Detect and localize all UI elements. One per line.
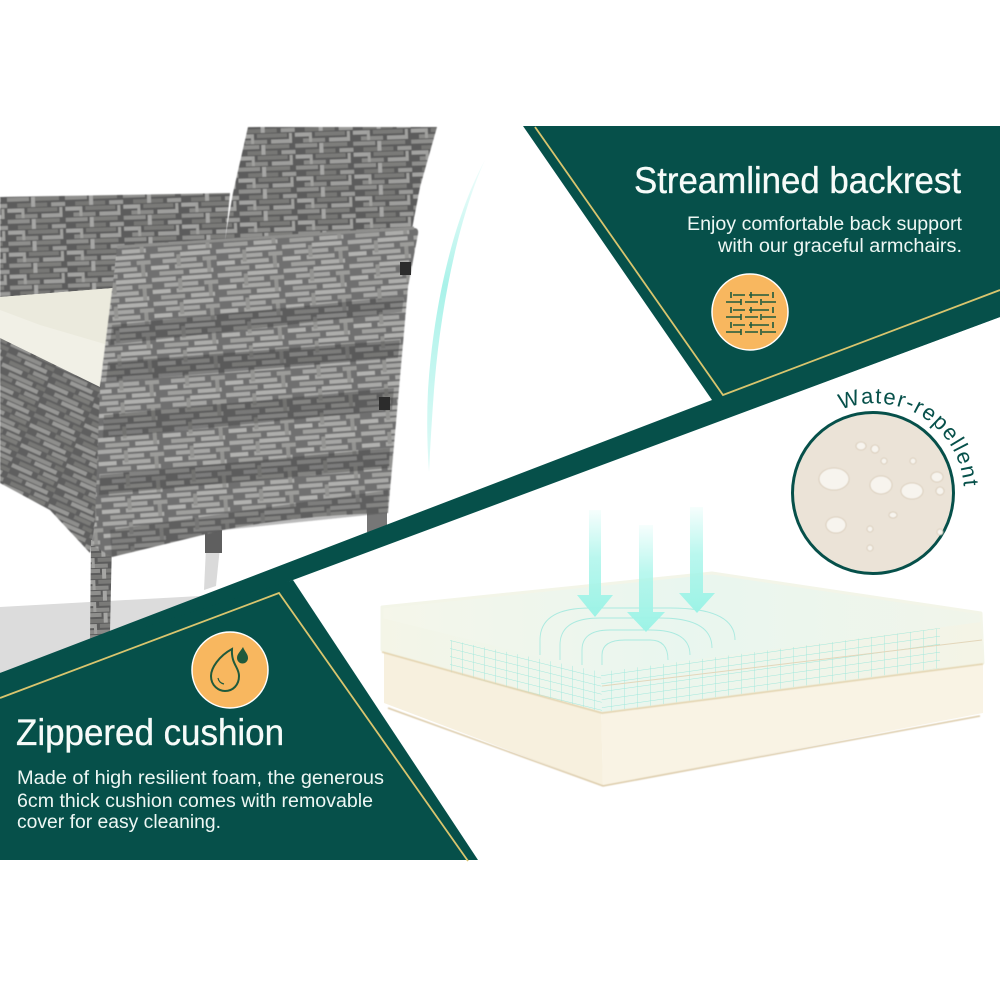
water droplets	[819, 442, 944, 551]
water-repellent swatch	[791, 389, 978, 575]
chair front arm panel	[92, 228, 418, 557]
icon: wicker weave	[712, 274, 788, 350]
heading: Streamlined backrest	[634, 160, 962, 201]
description: Made of high resilient foam, the generous	[17, 768, 384, 789]
lower cushion	[384, 648, 983, 786]
description: cover for easy cleaning.	[17, 812, 221, 833]
description	[17, 768, 384, 833]
chair backrest	[223, 127, 437, 250]
foam mesh	[450, 608, 940, 712]
chair photo	[0, 127, 437, 675]
description	[687, 214, 963, 257]
fabric circle	[792, 412, 954, 574]
chair side panel	[0, 330, 104, 553]
curved label: Water-repellent	[836, 389, 978, 486]
description: Enjoy comfortable back support	[687, 214, 963, 235]
zipper seam	[602, 640, 982, 686]
description: with our graceful armchairs.	[717, 236, 962, 257]
gold border line	[0, 593, 468, 861]
back leg shadow	[204, 547, 220, 590]
heading: Zippered cushion	[16, 712, 284, 753]
panel: zippered cushion	[0, 580, 478, 861]
mint curved accent	[427, 160, 485, 472]
arrows pressing down	[577, 507, 715, 632]
chair seat cushion	[0, 288, 114, 387]
floor shadow	[0, 592, 235, 675]
gold border line	[535, 127, 1000, 395]
panel: streamlined backrest	[523, 126, 1000, 420]
chair right leg	[367, 510, 387, 532]
chair bolts	[379, 262, 411, 410]
icon: water drops	[192, 632, 268, 708]
cushion illustration	[382, 507, 983, 786]
chair rear leg	[205, 530, 222, 553]
chair inner back	[0, 193, 230, 305]
diagonal green band	[0, 290, 1000, 690]
chair front leg	[90, 540, 112, 640]
description: 6cm thick cushion comes with removable	[17, 791, 373, 812]
upper cushion	[382, 573, 983, 713]
